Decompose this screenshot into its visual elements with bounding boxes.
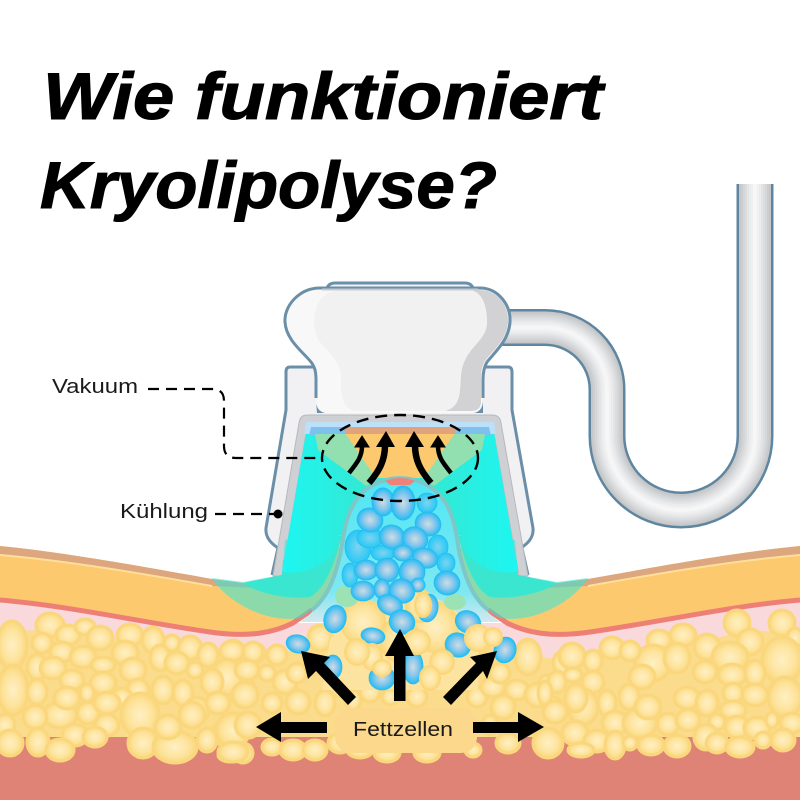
arrow: right: [473, 712, 544, 742]
title: Kryolipolyse?: [40, 148, 497, 222]
title: Wie funktioniert: [43, 59, 606, 133]
title: [40, 59, 606, 222]
cooling zone: [212, 422, 588, 619]
blue frozen fat cells: [284, 592, 519, 690]
subcutaneous pink layer: [0, 600, 800, 732]
label: Vakuum: [52, 376, 322, 458]
label: Fettzellen: Fettzellen: [353, 719, 453, 741]
arrow: left: [256, 712, 327, 742]
cluster of blue cells in dome: [342, 486, 463, 638]
dome of skin interior: [300, 478, 500, 622]
arrow: up-right: [443, 651, 497, 705]
expansion arrows: [256, 629, 544, 742]
redraw of top blue cells: [372, 486, 415, 520]
vacuum dashed ellipse: [322, 415, 478, 501]
label: Vakuum: Vakuum: [52, 376, 138, 398]
arrow: up-left: [301, 651, 356, 705]
vacuum: tan band: [345, 427, 455, 434]
tube: [495, 184, 755, 510]
vacuum: green air wedges: [315, 434, 485, 486]
green tint patches beside dome: [335, 585, 466, 610]
fat base: [0, 630, 800, 737]
label: Kühlung: [120, 501, 282, 523]
cooling: middle flare: [243, 535, 557, 598]
grey cooling frame: [273, 415, 528, 576]
fat inside dome: [322, 590, 478, 690]
cooling: outer translucent flare: [212, 530, 588, 619]
muscle layer: [0, 732, 800, 800]
fat cells: [0, 610, 800, 763]
vacuum: orange wedge: [345, 433, 455, 478]
cooling: main chamber: [282, 427, 518, 573]
dome red tip: [385, 478, 415, 485]
device head: [285, 283, 510, 413]
arrow: up: [385, 629, 414, 701]
label: Fettzellen: [335, 708, 477, 753]
fat cells overlapping blue cells: [345, 593, 502, 690]
skin layers: [0, 530, 800, 634]
curved vacuum arrows: [349, 431, 451, 483]
dome outline: [312, 478, 488, 610]
device housing: [266, 367, 533, 575]
label: Kühlung: Kühlung: [120, 501, 208, 523]
cooling: pale top band: [304, 422, 496, 434]
